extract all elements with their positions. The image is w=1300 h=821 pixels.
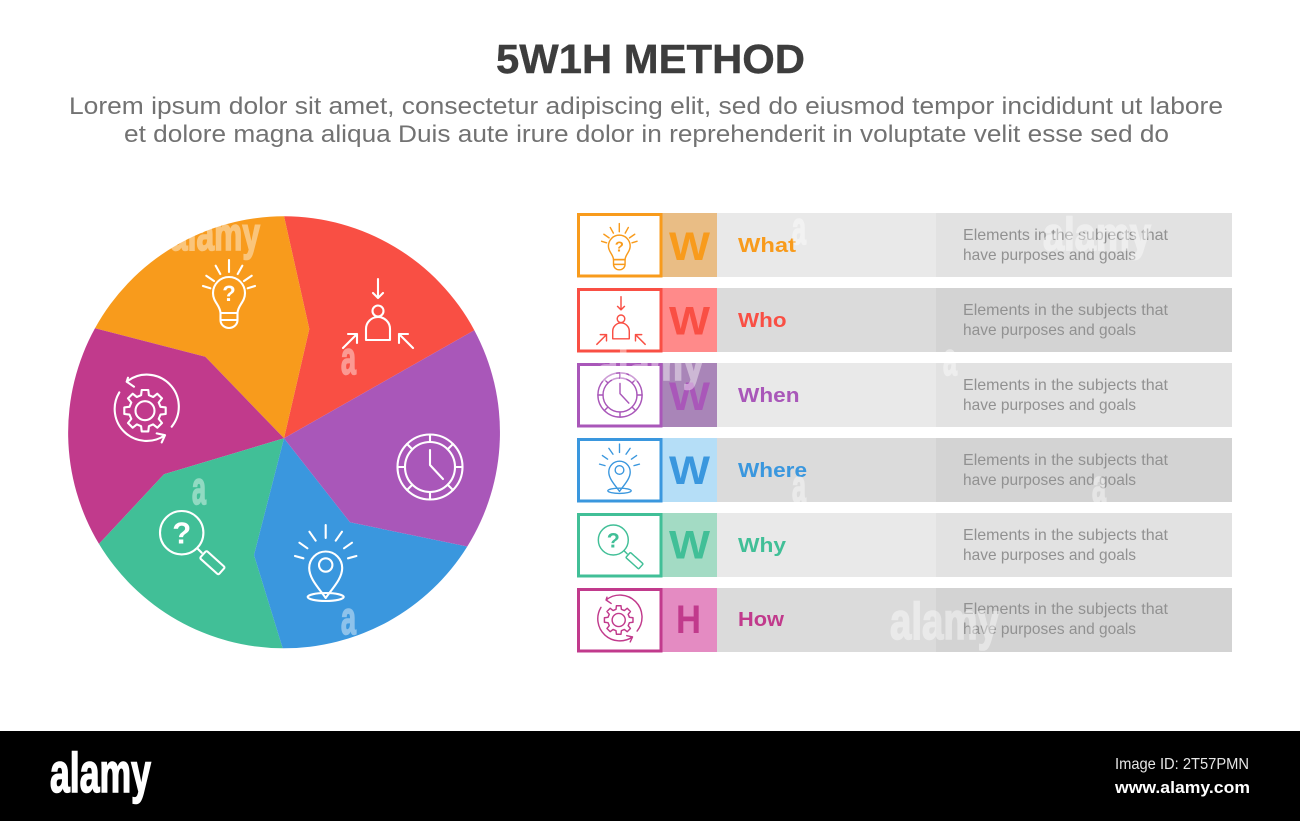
icon: person with arrows: [343, 279, 413, 348]
footer logo: alamy: [50, 741, 151, 804]
row icon: light bulb: [602, 224, 637, 270]
footer bar: [0, 731, 1300, 821]
icon: magnifier question: [160, 511, 225, 575]
row: where: have purposes and goals: [963, 472, 1136, 489]
row: why: W: [669, 524, 710, 568]
row: how: have purposes and goals: [963, 621, 1136, 638]
row: why: Elements in the subjects that: [963, 527, 1169, 544]
row: when: [578, 363, 1232, 427]
row icon: light bulb: ?: [615, 238, 624, 255]
watermarks: alamy: [890, 593, 999, 651]
row: when: have purposes and goals: [963, 397, 1136, 414]
watermarks: a: [792, 460, 806, 512]
watermarks: alamy: [1043, 208, 1151, 260]
row icon: person: [597, 297, 645, 344]
row: how: [578, 588, 1232, 652]
row: where: [578, 438, 1232, 502]
watermarks: a: [192, 462, 206, 514]
row: why: Why: [738, 535, 787, 557]
icon: location pin: [295, 525, 356, 601]
watermarks: a: [341, 592, 356, 644]
row: who: [578, 288, 1232, 352]
row: who: have purposes and goals: [963, 322, 1136, 339]
row: how: How: [738, 609, 784, 631]
row: when: Elements in the subjects that: [963, 377, 1169, 394]
watermarks: a: [943, 333, 957, 385]
row: who: Who: [738, 310, 786, 332]
watermarks: [170, 202, 1151, 651]
row: how: Elements in the subjects that: [963, 601, 1169, 618]
watermarks: a: [341, 332, 356, 384]
watermarks: a: [1092, 460, 1106, 512]
subtitle text block: et dolore magna aliqua Duis aute irure dolor in reprehenderit in voluptate velit esse sed do: [124, 121, 1169, 148]
title: 5W1H METHOD: [496, 36, 805, 82]
segment: how: [68, 328, 284, 544]
segment: where: [254, 438, 467, 648]
watermarks: alamy: [170, 208, 260, 260]
watermarks: a: [792, 202, 806, 254]
icon: clock: [398, 434, 462, 500]
row: who: Elements in the subjects that: [963, 302, 1169, 319]
segment: what: [95, 216, 309, 438]
row: what: [578, 213, 1232, 277]
row: why: have purposes and goals: [963, 547, 1136, 564]
row: what: have purposes and goals: [963, 247, 1136, 264]
segment: why: [99, 438, 284, 648]
icon: magnifier question: ?: [172, 516, 191, 551]
icon: light bulb question: ?: [222, 281, 236, 306]
row: where: Where: [738, 460, 807, 482]
icon: light bulb question: [203, 260, 255, 328]
row: how: H: [676, 598, 701, 642]
footer url: www.alamy.com: [1114, 778, 1250, 797]
row: what: W: [669, 225, 710, 269]
row icon: gear cycle: [598, 595, 642, 642]
segment: who: [284, 216, 474, 438]
row: what: What: [738, 235, 796, 257]
row: when: When: [738, 385, 800, 407]
segment: when: [284, 330, 500, 546]
image id: Image ID: 2T57PMN: [1115, 756, 1249, 773]
row icon: location pin: [600, 444, 639, 493]
row icon: clock: [598, 373, 642, 417]
watermarks: alamy: [597, 338, 704, 390]
row: who: W: [669, 300, 710, 344]
row icon: magnifier: ?: [607, 529, 620, 553]
row: what: Elements in the subjects that: [963, 227, 1169, 244]
subtitle text block: Lorem ipsum dolor sit amet, consectetur adipiscing elit, sed do eiusmod tempor incididunt ut labore: [69, 93, 1223, 120]
row icon: magnifier: [598, 525, 643, 569]
icon: gear cycle: [115, 375, 179, 442]
subtitle text block: [69, 93, 1223, 148]
pie chart: [68, 216, 500, 648]
row: where: Elements in the subjects that: [963, 452, 1169, 469]
row: when: W: [669, 375, 710, 419]
row: why: [578, 513, 1232, 577]
row: where: W: [669, 449, 710, 493]
